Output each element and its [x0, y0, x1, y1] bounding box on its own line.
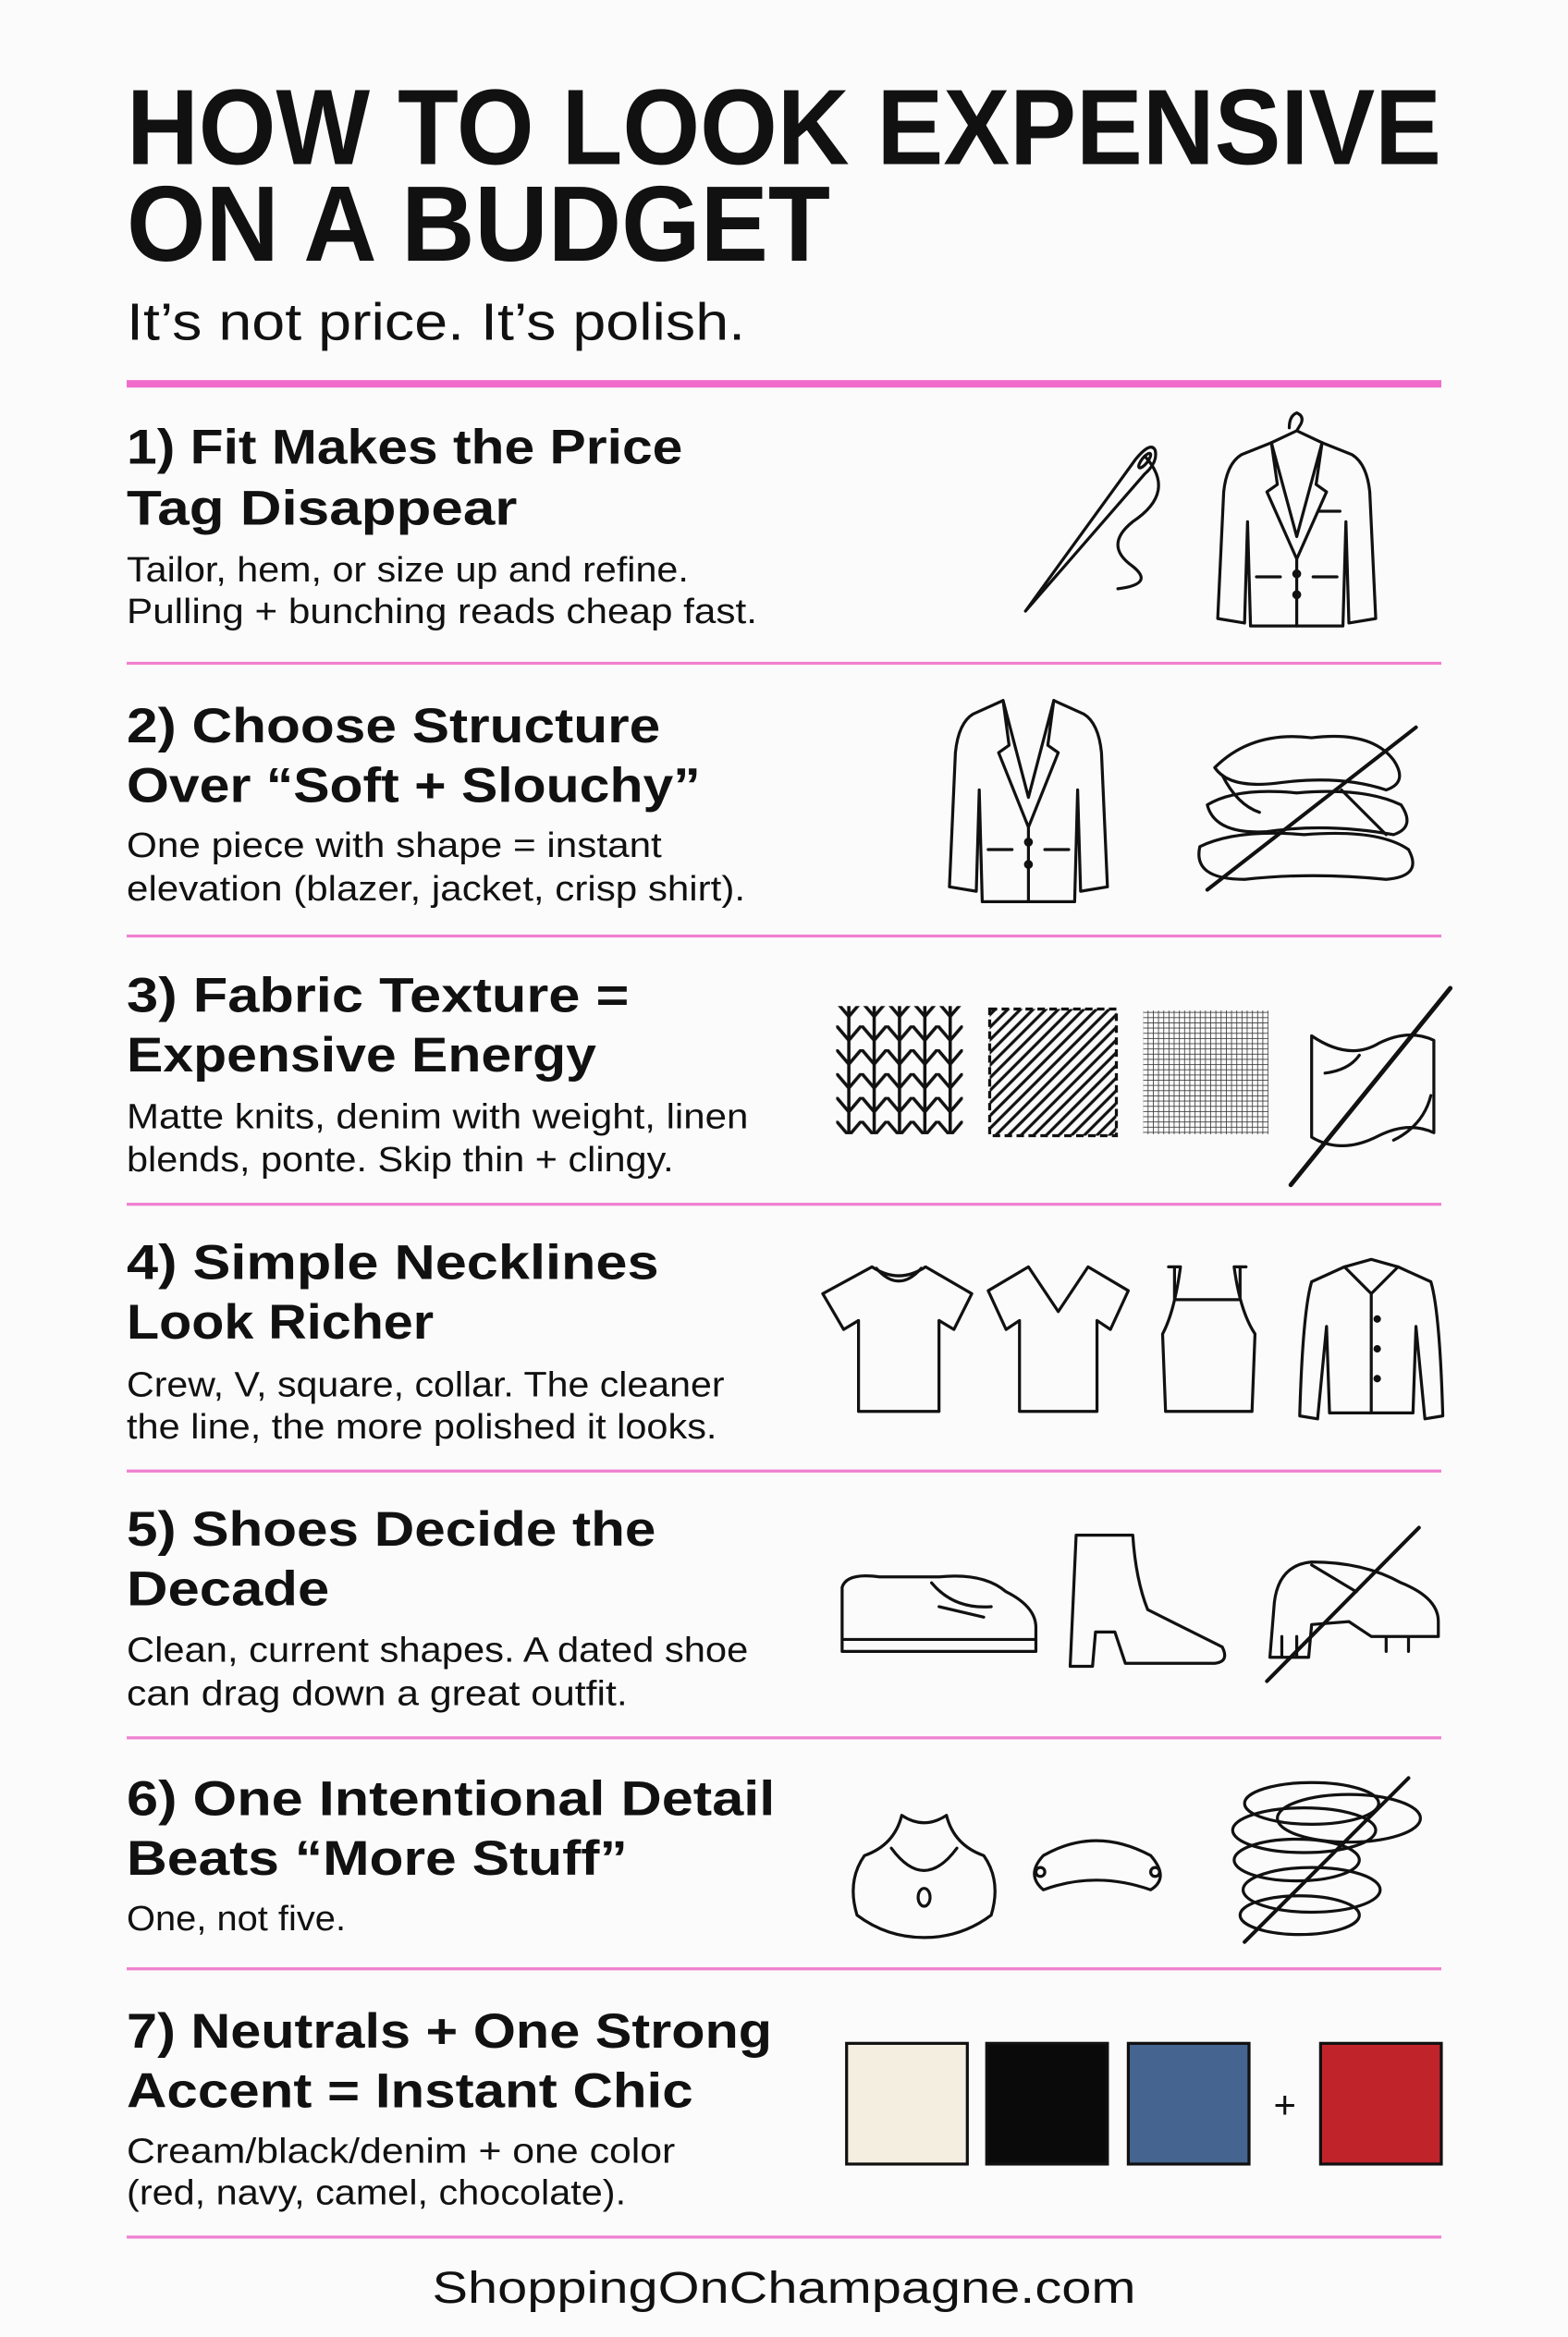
fabric swatches [836, 988, 1451, 1185]
section 3 text: blends, ponte. Skip thin + clingy. [127, 1141, 674, 1180]
section 3 text: Matte knits, denim with weight, linen [127, 1097, 748, 1136]
section 4 text: the line, the more polished it looks. [127, 1408, 717, 1447]
title [127, 67, 1441, 284]
section 7 text: 7) Neutrals + One Strong [127, 2004, 772, 2059]
section 4 text: Crew, V, square, collar. The cleaner [127, 1366, 725, 1405]
section 7 text [127, 2004, 772, 2212]
section 2 text: Over “Soft + Slouchy” [127, 758, 701, 813]
icon: button shirt [1300, 1259, 1443, 1419]
icon: tailored jacket on hanger [1218, 413, 1376, 626]
section 5 text: Clean, current shapes. A dated shoe [127, 1632, 748, 1670]
section 1 text: Pulling + bunching reads cheap fast. [127, 593, 757, 631]
icon: pendant necklace on bust [853, 1816, 995, 1938]
icon: cuff bracelet [1035, 1841, 1160, 1890]
section 1 text: Tag Disappear [127, 482, 517, 536]
icon: slouchy sweater crossed out [1199, 728, 1416, 890]
icon: crew tee [823, 1266, 972, 1412]
section 2 text: elevation (blazer, jacket, crisp shirt). [127, 870, 745, 909]
section 4 text: Look Richer [127, 1295, 434, 1350]
section 3 text: 3) Fabric Texture = [127, 969, 629, 1023]
icons: shoes [842, 1528, 1439, 1682]
section 1 text [127, 420, 757, 631]
section 4 text [127, 1235, 725, 1447]
section 5 text [127, 1502, 748, 1713]
section 5 text: Decade [127, 1561, 329, 1616]
section 2 text: One piece with shape = instant [127, 826, 662, 865]
section 3 text: Expensive Energy [127, 1028, 596, 1083]
swatch: knit [836, 1006, 962, 1134]
footer: ShoppingOnChampagne.com [433, 2263, 1135, 2313]
section 1 text: Tailor, hem, or size up and refine. [127, 551, 689, 590]
subtitle: It’s not price. It’s polish. [127, 293, 745, 351]
section 5 text: 5) Shoes Decide the [127, 1502, 655, 1557]
section 6 text [127, 1772, 775, 1939]
swatch: linen [1144, 1010, 1268, 1134]
section 6 text: 6) One Intentional Detail [127, 1772, 775, 1827]
section 7 text: Accent = Instant Chic [127, 2064, 693, 2119]
section 3 text [127, 969, 748, 1180]
section 5 text: can drag down a great outfit. [127, 1674, 628, 1713]
color swatches: + [1273, 2083, 1296, 2126]
color swatches [847, 2043, 1441, 2164]
icon: needle and thread [1025, 447, 1158, 611]
icon: chunky platform shoe crossed out [1270, 1562, 1439, 1658]
icon: blazer [949, 701, 1108, 901]
section 2 text: 2) Choose Structure [127, 699, 660, 753]
icon: square tank [1162, 1266, 1255, 1412]
section 7 text: Cream/black/denim + one color [127, 2132, 675, 2171]
swatch: thin clingy fabric crossed out [1291, 988, 1451, 1185]
title: ON A BUDGET [127, 164, 830, 284]
title: HOW TO LOOK EXPENSIVE [127, 67, 1441, 187]
section 7 text: (red, navy, camel, chocolate). [127, 2173, 626, 2212]
section 1 text: 1) Fit Makes the Price [127, 420, 682, 474]
swatch: denim twill [989, 1009, 1117, 1136]
icon: v-neck tee [988, 1266, 1128, 1412]
icon: loafer [842, 1576, 1035, 1651]
section 6 text: One, not five. [127, 1900, 346, 1939]
section 6 text: Beats “More Stuff” [127, 1831, 628, 1886]
icons: jewelry [853, 1778, 1420, 1942]
icon: ankle boot [1071, 1536, 1225, 1666]
section 4 text: 4) Simple Necklines [127, 1235, 659, 1290]
section 2 text [127, 699, 745, 909]
icons: necklines tops [823, 1259, 1443, 1419]
icon: stacked bangles crossed out [1244, 1782, 1378, 1824]
